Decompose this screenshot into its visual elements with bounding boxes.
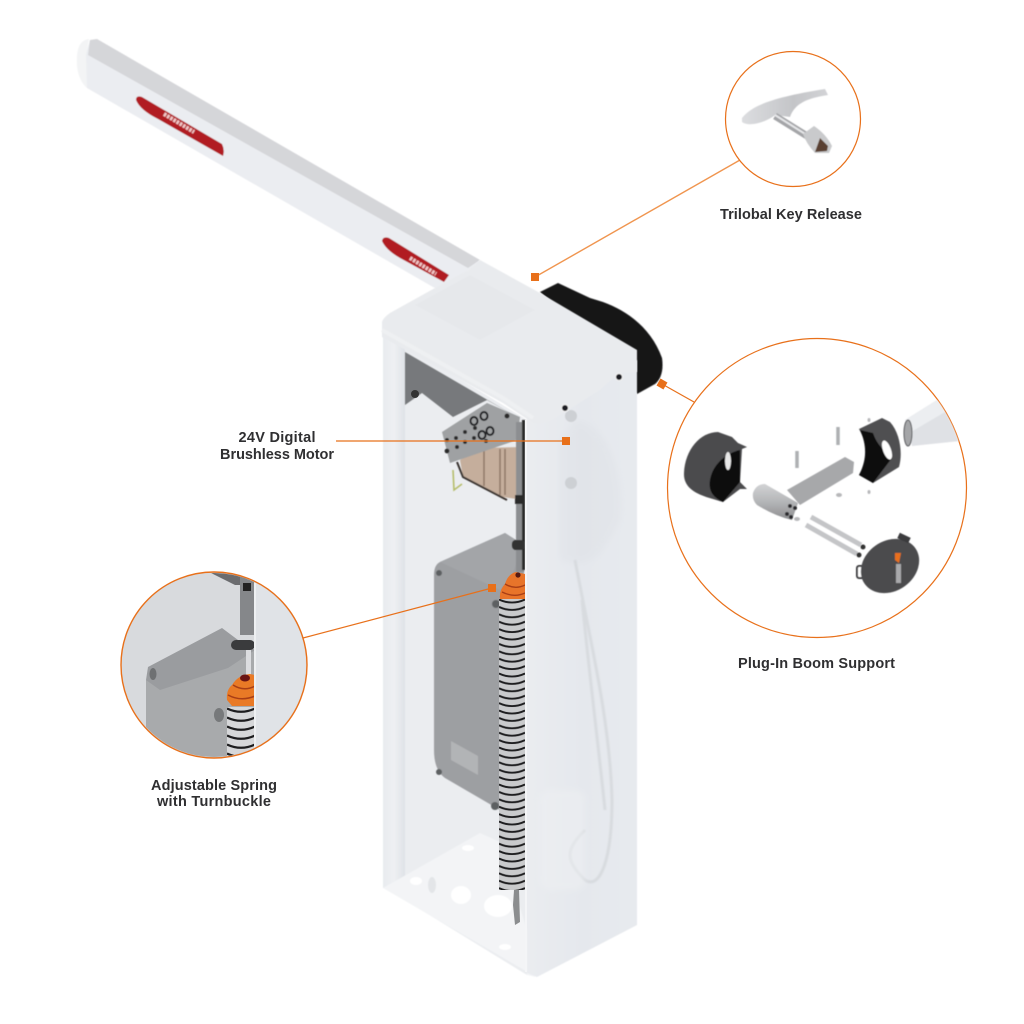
motor label: 24V Digital [238,430,316,446]
end cap logo [895,553,901,563]
red reflector 1 [136,96,224,156]
floor holes [410,845,512,950]
leader: key release [531,160,740,281]
spring bottom hook [513,890,520,925]
spring circle [121,572,307,758]
right face edge [525,420,527,972]
cover screws [562,404,568,412]
top plate [211,573,254,585]
turnbuckle [500,572,525,599]
leader: motor [336,437,570,445]
vertical linkage rod [516,422,524,572]
center divider [254,582,256,748]
motor assembly [442,403,525,572]
red reflector 2 [382,237,449,282]
linkage rod [240,575,255,635]
spring coils [499,598,525,890]
box holes [150,668,156,680]
cover front edge [382,330,533,418]
mounting bracket [442,403,520,463]
control box top face [440,533,524,590]
pivot holes [785,504,797,519]
rear black boom support [540,283,663,394]
motor lower edge [457,462,507,500]
copper motor [460,447,523,500]
rod highlight [246,650,251,674]
key circle [726,52,860,186]
cabinet left pillar [383,330,405,888]
right shell [859,418,901,483]
control box label [451,741,478,775]
cabinet [383,330,637,977]
cabinet right face [527,360,637,977]
panel bolt [411,390,419,398]
callout: adjustable spring [121,570,315,762]
boom support label: Plug-In Boom Support [738,656,895,672]
boom arm [77,39,480,291]
control box screws [436,570,500,810]
spring label [151,778,277,810]
end cap tab [857,566,867,578]
end cap [850,528,930,604]
leader: boom support [657,379,694,402]
motor label: Brushless Motor [220,447,334,463]
ghost bolts [565,410,577,422]
motor label [220,430,334,463]
linkage clamp [515,495,525,504]
callout: trilobal key [726,52,860,186]
cabinet floor plate [383,833,536,977]
cover panel shade [415,275,535,340]
turnbuckle [227,674,255,706]
ghost bracket shadow [560,420,621,564]
washers [794,418,870,521]
boom circle [668,338,966,638]
right panel strip [256,584,306,746]
dark panel behind motor [405,352,517,417]
leader: spring [303,584,496,638]
turnbuckle rings [228,685,255,699]
box top face [146,628,255,690]
end cap notch [897,533,911,543]
key label: Trilobal Key Release [720,207,862,223]
motor ribs [484,449,505,495]
ghost lower shape [540,790,585,890]
pivot cylinder [753,484,798,520]
cover top [382,260,637,423]
boom end cap [77,39,89,88]
boom top stripe [88,39,480,268]
green wire [453,470,462,490]
ghost cable loop [570,560,612,882]
spring label: Adjustable Spring [151,778,277,794]
boom stub [902,400,959,448]
mounting arm [787,457,854,505]
spring label: with Turnbuckle [156,794,271,810]
cabinet cover [382,260,637,423]
turnbuckle rings [502,584,525,595]
icon: key [742,89,832,153]
pins [806,517,861,554]
box front [146,650,254,757]
linkage dark edge [522,420,525,570]
bolts [797,427,838,468]
magnified detail [146,570,315,762]
control box [434,533,524,810]
exploded parts [684,400,970,604]
coils [227,707,254,756]
left dome inner [710,450,740,502]
reflector logo marks [164,114,436,274]
right shell inner [859,430,892,483]
control box body [434,533,524,810]
callout: plug-in boom support [668,338,970,638]
left dome [684,432,747,502]
clevis [231,640,255,650]
spring [499,572,525,925]
bracket sockets [470,412,494,439]
bracket holes [445,414,510,453]
cabinet interior [405,345,527,975]
boom body [84,40,480,291]
